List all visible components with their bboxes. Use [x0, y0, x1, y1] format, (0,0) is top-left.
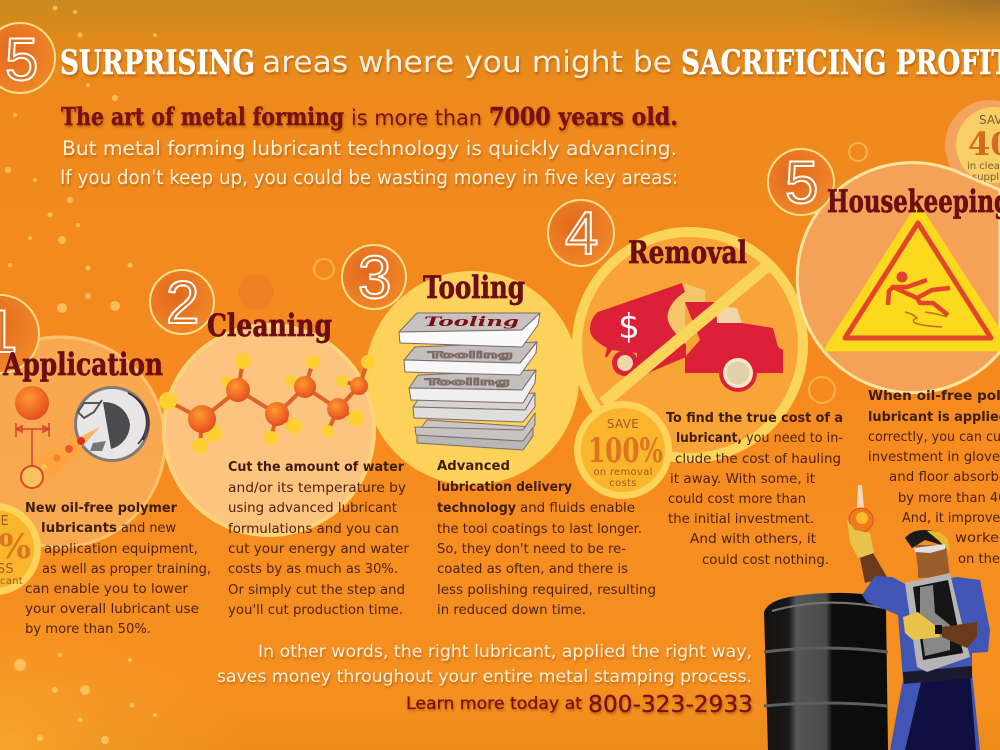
cleaning text: cut your energy and water	[228, 541, 409, 557]
icon: tanker truck	[590, 283, 783, 392]
pan interior	[913, 580, 963, 660]
number 5	[768, 149, 834, 216]
panel: application	[0, 295, 211, 637]
glove	[847, 520, 874, 558]
icon: stack of tooling plates: Tooling	[428, 351, 513, 361]
application text: New oil-free polymer	[25, 500, 177, 516]
closing text: Learn more today at	[406, 694, 582, 714]
prohibition slash	[603, 262, 772, 403]
application circle	[0, 337, 165, 547]
tooling text: So, they don't need to be re-	[437, 541, 626, 557]
heading removal: Removal	[628, 235, 747, 271]
panel: tooling	[342, 244, 656, 618]
icon: stack of tooling plates: Tooling	[424, 315, 519, 330]
header number badge: 5	[5, 26, 38, 93]
cap crown	[927, 531, 950, 552]
pan detail	[920, 585, 950, 656]
header number badge	[0, 23, 55, 93]
tooling text: in reduced down time.	[437, 602, 586, 618]
cleaning circle	[164, 325, 374, 535]
illustration: oil barrel	[764, 593, 888, 750]
heading cleaning: Cleaning	[207, 308, 332, 344]
oil pan	[905, 573, 970, 672]
title: SURPRISING	[60, 43, 255, 83]
callout: save 100%: SAVE	[607, 417, 639, 431]
number 3: 3	[358, 244, 391, 311]
number 2	[150, 269, 214, 336]
intro text block	[60, 102, 678, 189]
intro text block: But metal forming lubricant technology is quickly advancing.	[62, 137, 677, 160]
number 2: 2	[166, 269, 199, 336]
panel: housekeeping	[768, 100, 1000, 567]
cap	[905, 530, 948, 548]
cleaning text: Cut the amount of water	[228, 459, 404, 475]
housekeeping text	[868, 388, 1000, 567]
removal text	[666, 410, 843, 568]
tooling text: Advanced	[437, 458, 510, 474]
tooling text: the tool coatings to last longer.	[437, 521, 642, 537]
removal text: it away. With some, it	[670, 471, 815, 487]
housekeeping text: on the	[958, 551, 1000, 567]
closing text	[217, 642, 753, 718]
belt	[903, 666, 972, 684]
removal text: And with others, it	[690, 531, 816, 547]
panel: cleaning	[150, 269, 409, 618]
application text: can enable you to lower	[25, 581, 188, 597]
application text: your overall lubricant use	[25, 601, 199, 617]
number 4	[548, 200, 614, 267]
cleaning text: you'll cut production time.	[228, 602, 403, 618]
forearm	[942, 622, 977, 648]
removal text: clude the cost of hauling	[675, 451, 841, 467]
application text: by more than 50%.	[25, 621, 151, 637]
cleaning text: Or simply cut the step and	[228, 582, 405, 598]
icon: stack of tooling plates: Tooling	[425, 378, 510, 388]
icon: slippery floor warning sign	[825, 205, 1000, 350]
arm raised	[860, 553, 887, 583]
title: areas where you might be	[262, 45, 672, 79]
cleaning text	[228, 459, 409, 618]
safety glasses	[914, 544, 945, 553]
icon: tanker truck: $	[618, 307, 640, 347]
removal text: the initial investment.	[668, 511, 814, 527]
callout: save 100%: costs	[609, 478, 637, 489]
closing text: In other words, the right lubricant, applied the right way,	[258, 642, 752, 662]
gloved hand	[903, 612, 940, 640]
tooling text: and fluids enable	[520, 500, 635, 516]
tooling circle	[365, 271, 579, 485]
callout: save 100%: on removal	[593, 467, 653, 478]
intro text block: If you don't keep up, you could be wasting money in five key areas:	[60, 166, 678, 189]
closing text: saves money throughout your entire metal stamping process.	[217, 667, 752, 687]
callout: use less lubricant	[0, 503, 41, 595]
cleaning text: costs by as much as 30%.	[228, 561, 398, 577]
application text: as well as proper training,	[42, 561, 211, 577]
removal text: lubricant,	[676, 430, 742, 446]
heading application: Application	[2, 347, 163, 383]
removal text: you need to in-	[746, 430, 843, 446]
removal text: To find the true cost of a	[666, 410, 843, 426]
application text: application equipment,	[44, 541, 198, 557]
number 3	[342, 244, 406, 311]
tooling text: lubrication delivery	[437, 479, 572, 495]
application text: lubricants	[41, 520, 117, 536]
trouser shadow	[905, 673, 976, 750]
closing text: 800-323-2933	[588, 692, 753, 718]
wristwatch	[935, 625, 942, 634]
removal text: could cost nothing.	[702, 552, 829, 568]
title	[60, 43, 1000, 83]
application text	[25, 500, 211, 637]
icon: stack of tooling plates	[399, 313, 540, 450]
illustration: worker holding flask	[847, 485, 990, 750]
cleaning text: using advanced lubricant	[228, 500, 397, 516]
tooling text: technology	[437, 500, 516, 516]
callout: save 100%	[574, 401, 672, 499]
intro text block: is more than	[351, 106, 482, 130]
neck and face	[915, 545, 950, 578]
number 4: 4	[565, 200, 598, 267]
tooling text	[437, 458, 656, 618]
removal circle	[577, 232, 803, 458]
flask	[848, 485, 873, 532]
callout: save 100%: 100%	[588, 431, 663, 471]
icon: spray nozzle	[33, 386, 150, 480]
icon: droplet size diagram	[15, 386, 49, 488]
panel: removal	[548, 200, 843, 568]
callout: save 40%	[945, 100, 1000, 190]
housekeeping circle	[797, 163, 1000, 393]
number 5: 5	[785, 149, 818, 216]
molecule diagram	[159, 353, 375, 454]
number 1	[0, 295, 39, 373]
application text: and new	[121, 520, 176, 536]
torso and legs	[862, 576, 990, 750]
tooling text: less polishing required, resulting	[437, 582, 656, 598]
cleaning text: formulations and you can	[228, 521, 399, 537]
removal text: could cost more than	[668, 491, 806, 507]
tooling text: coated as often, and there is	[437, 561, 628, 577]
heading tooling: Tooling	[423, 270, 525, 306]
intro text block: 7000 years old.	[489, 102, 678, 131]
intro text block: The art of metal forming	[61, 102, 344, 131]
cleaning text: and/or its temperature by	[228, 480, 406, 496]
housekeeping text: worker	[955, 530, 1000, 546]
